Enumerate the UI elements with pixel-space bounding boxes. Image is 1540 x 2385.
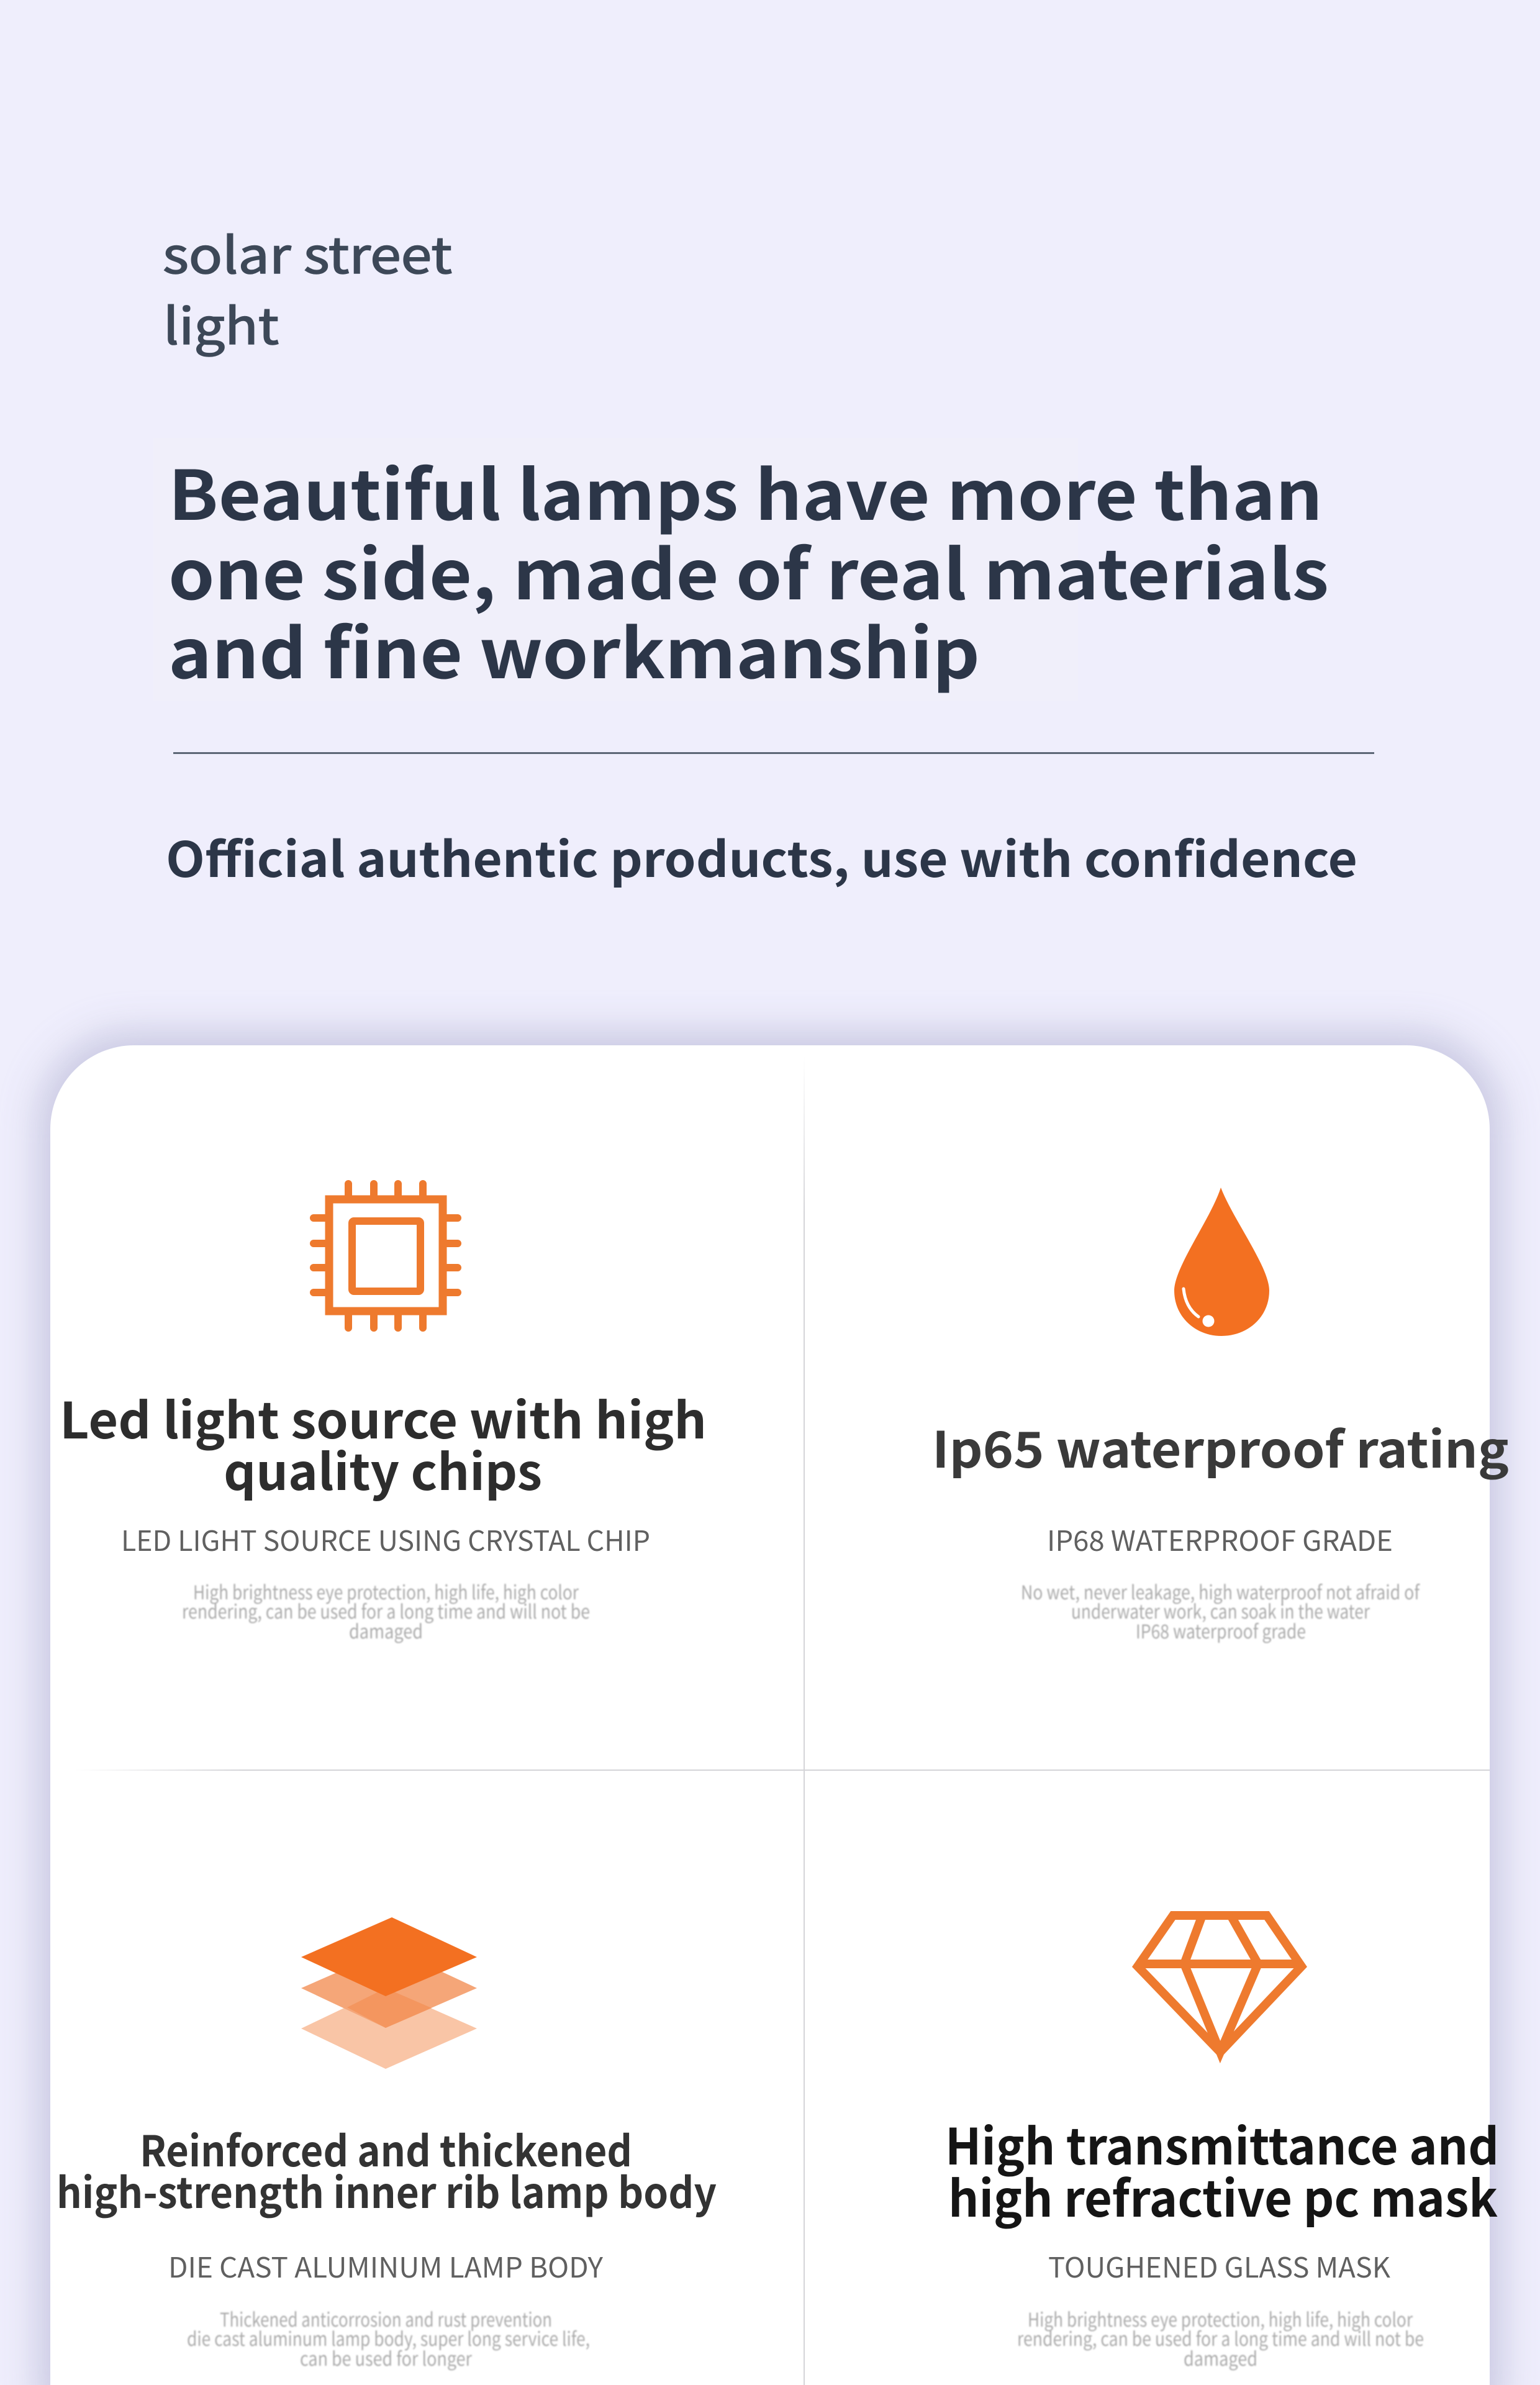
- title: Beautiful lamps have more than: [168, 440, 1323, 540]
- title: [168, 440, 1329, 698]
- title: and fine workmanship: [168, 599, 980, 698]
- description: underwater work, can soak in the water: [1071, 1596, 1370, 1624]
- description: rendering, can be used for a long time and will not be: [182, 1596, 590, 1624]
- icon: layers: [301, 1917, 477, 2069]
- eyebrow: solar street light: light: [163, 287, 279, 359]
- icon: water drop: [1174, 1188, 1269, 1336]
- heading: [60, 1381, 707, 1505]
- description: damaged: [1184, 2343, 1257, 2371]
- heading: Ip65 waterproof rating: [932, 1411, 1509, 1483]
- heading: [945, 2107, 1499, 2232]
- panel: header: [153, 216, 1374, 891]
- heading: [57, 2117, 717, 2220]
- feature: LED chip: [60, 1184, 707, 1644]
- subheading: LED LIGHT SOURCE USING CRYSTAL CHIP: [121, 1519, 650, 1559]
- title: one side, made of real materials: [168, 520, 1329, 619]
- feature: pc mask: [945, 1915, 1499, 2371]
- subheading: TOUGHENED GLASS MASK: [1048, 2245, 1390, 2286]
- icon: chip: [314, 1184, 458, 1328]
- description: die cast aluminum lamp body, super long service life,: [187, 2324, 590, 2351]
- description: Thickened anticorrosion and rust prevention: [220, 2304, 552, 2332]
- eyebrow: solar street light: [163, 216, 452, 359]
- description: rendering, can be used for a long time and will not be: [1017, 2324, 1424, 2351]
- heading: high-strength inner rib lamp body: [57, 2159, 717, 2220]
- description: [182, 1577, 590, 1644]
- description: [1017, 2304, 1424, 2371]
- description: High brightness eye protection, high life, high color: [193, 1577, 579, 1605]
- panel: feature card: [50, 1045, 1509, 2385]
- feature: lamp body: [57, 1917, 717, 2371]
- subheading: IP68 WATERPROOF GRADE: [1047, 1519, 1393, 1559]
- description: No wet, never leakage, high waterproof not afraid of: [1021, 1577, 1421, 1605]
- description: IP68 waterproof grade: [1136, 1616, 1306, 1644]
- heading: quality chips: [224, 1433, 542, 1505]
- icon: diamond: [1138, 1915, 1302, 2052]
- heading: High transmittance and: [945, 2107, 1499, 2179]
- feature: waterproof: [932, 1188, 1509, 1644]
- eyebrow: solar street light: solar street: [163, 216, 452, 288]
- heading: Led light source with high: [60, 1381, 707, 1453]
- subtitle: Official authentic products, use with confidence: [166, 822, 1357, 891]
- heading: high refractive pc mask: [948, 2160, 1498, 2232]
- subheading: DIE CAST ALUMINUM LAMP BODY: [168, 2245, 603, 2286]
- heading: Reinforced and thickened: [140, 2117, 632, 2179]
- description: [187, 2304, 590, 2371]
- description: High brightness eye protection, high life, high color: [1028, 2304, 1413, 2332]
- description: [1021, 1577, 1421, 1644]
- description: damaged: [349, 1616, 423, 1644]
- description: can be used for longer: [300, 2343, 473, 2371]
